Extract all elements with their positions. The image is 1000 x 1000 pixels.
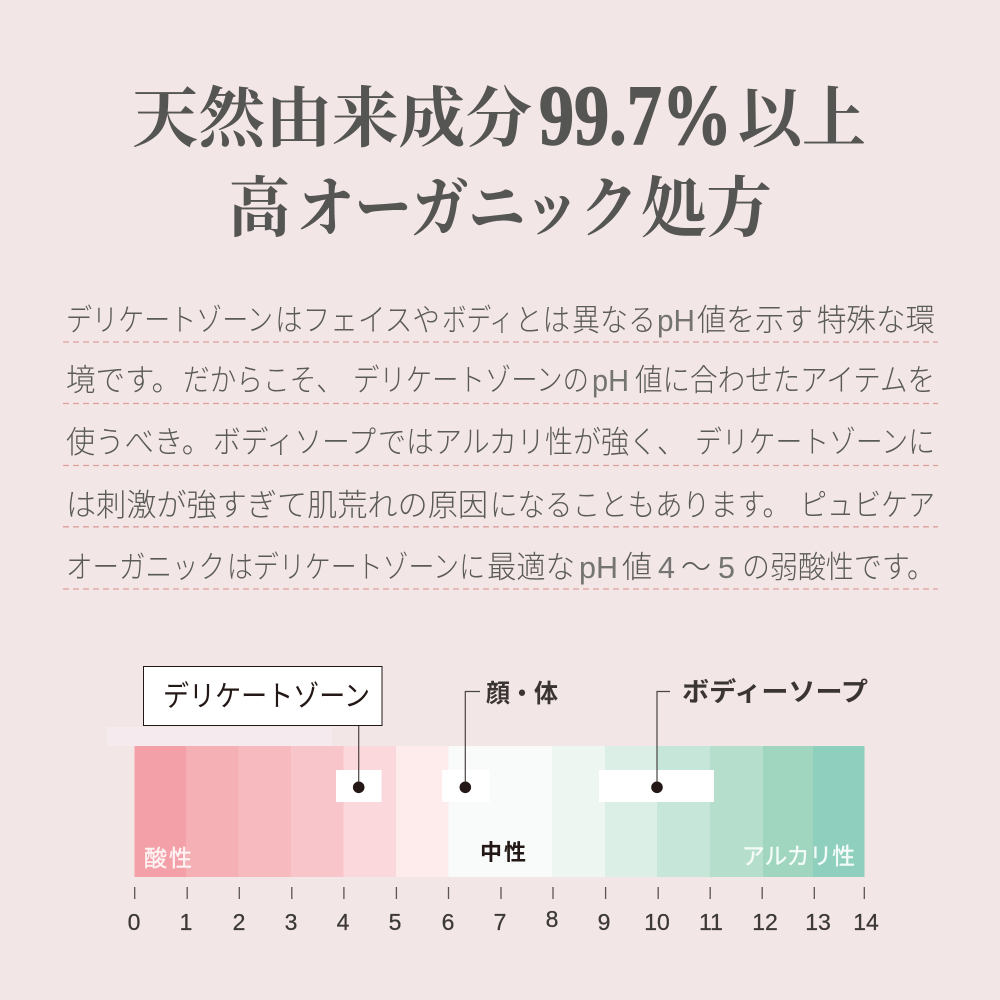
body line 2: だからこそ、 <box>183 363 343 398</box>
label: neutral: 中性 <box>480 840 526 865</box>
axis ticks <box>135 887 864 899</box>
axis numbers: 8 <box>546 906 558 932</box>
marker: delicate zone <box>144 666 382 793</box>
body line 5: pH <box>579 550 618 585</box>
title: 99.7% <box>539 67 732 163</box>
body line 5: はデリケートゾーンに <box>227 550 485 585</box>
axis numbers: 9 <box>598 909 610 935</box>
title: 以上 <box>738 83 866 156</box>
body line 2: 境です。 <box>66 363 181 398</box>
body line 4 <box>66 488 935 523</box>
body line 3: ではアルカリ性が強く、 <box>378 425 685 460</box>
axis numbers: 3 <box>285 909 297 935</box>
body line 5: 最適な <box>487 550 575 585</box>
body line 5: の弱酸性です。 <box>742 550 935 585</box>
body line 5 <box>66 550 935 585</box>
body line 1: とは <box>515 303 570 338</box>
body line 2: デリケートゾーンの <box>353 363 589 398</box>
pH chart <box>107 666 879 935</box>
body line 1 <box>66 303 935 338</box>
title: 処方 <box>641 173 772 246</box>
axis numbers: 10 <box>644 909 670 935</box>
body line 1: ボディ <box>442 303 514 338</box>
body line 4: になることもあります。 <box>490 488 790 523</box>
body line 2: pH <box>592 363 629 398</box>
axis numbers: 12 <box>752 909 778 935</box>
title: 天然由来成分 <box>132 83 532 156</box>
body line 3: デリケートゾーンに <box>695 425 935 460</box>
title <box>132 67 866 246</box>
axis numbers: 6 <box>442 909 454 935</box>
marker: body soap: ボディーソープ <box>682 677 868 707</box>
body line 2 <box>66 363 935 398</box>
axis numbers: 4 <box>337 909 350 935</box>
marker highlights <box>336 770 714 802</box>
body line 3: ボディソープ <box>213 425 376 460</box>
body line 1: デリケートゾーン <box>66 303 273 338</box>
body line 2: 値に合わせたアイテムを <box>635 363 935 398</box>
body line 5: 4 <box>658 550 675 585</box>
body line 1: 異なる <box>572 303 656 338</box>
body line 3 <box>66 425 935 460</box>
axis numbers: 0 <box>128 909 140 935</box>
body line 5: 5 <box>718 550 735 585</box>
body line 4: は刺激が強すぎて肌荒れの原因 <box>66 488 488 523</box>
axis numbers: 14 <box>853 909 879 935</box>
axis numbers: 2 <box>233 909 245 935</box>
axis numbers: 7 <box>494 909 506 935</box>
marker: body soap <box>651 677 868 793</box>
body line 1: pH <box>657 303 695 338</box>
marker: face and body <box>460 680 558 793</box>
axis numbers: 11 <box>699 909 723 935</box>
axis numbers: 13 <box>805 909 831 935</box>
body text block <box>63 303 938 589</box>
axis numbers: 5 <box>389 909 401 935</box>
body line 5: 値 <box>622 550 652 585</box>
body line 1: 特殊な環 <box>817 303 935 338</box>
body line 5: ～ <box>681 550 711 585</box>
label: acidic: 酸性 <box>144 845 192 871</box>
body line 4: ピュビケア <box>800 488 935 523</box>
pH colour scale bar <box>134 746 864 877</box>
body line 3: 使うべき。 <box>66 425 211 460</box>
title: オーガニック <box>297 173 638 246</box>
body line 1: 値を示す <box>697 303 813 338</box>
title: 高 <box>229 173 290 246</box>
body line 5: オーガニック <box>66 550 225 585</box>
marker: face and body: 顔・体 <box>486 680 558 708</box>
axis numbers: 1 <box>180 909 192 935</box>
body line 1: はフェイスや <box>275 303 440 338</box>
axis numbers <box>128 906 879 935</box>
marker: delicate zone: デリケートゾーン <box>163 680 370 713</box>
label: alkaline: アルカリ性 <box>742 843 855 869</box>
